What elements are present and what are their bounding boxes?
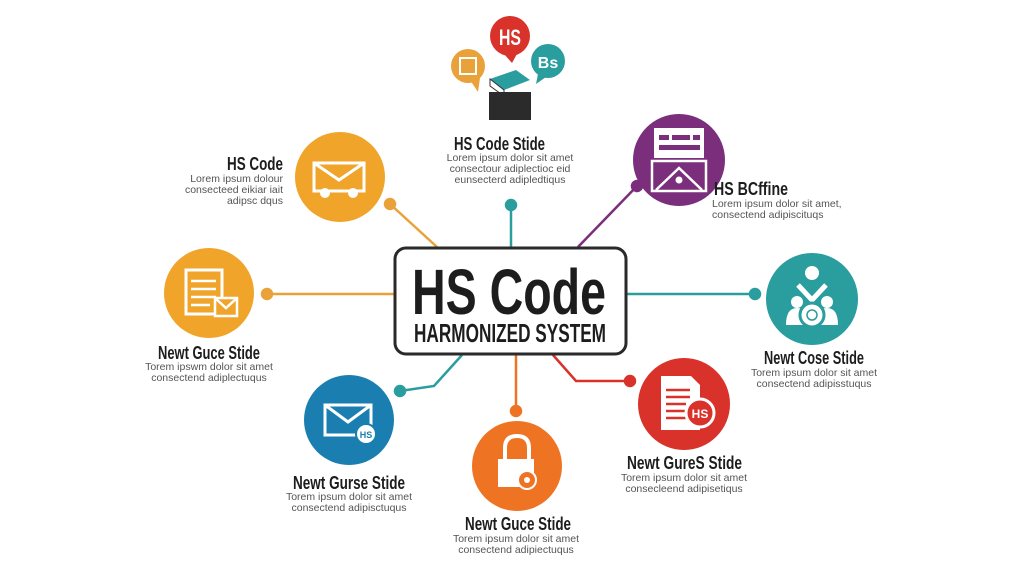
icon: orange left circle [164, 248, 254, 338]
connector: right teal [627, 289, 760, 299]
icon: purple circle [633, 114, 725, 206]
connector: red [553, 355, 635, 386]
text: Newt GureS Stide: consecleend adipisetiqus [625, 483, 743, 495]
text: Newt Guce Stide bottom: Newt Guce Stide [465, 514, 571, 534]
icon: teal right circle [766, 253, 858, 345]
text: Newt Gurse Stide: Newt Gurse Stide [293, 473, 405, 493]
text: Newt Cose Stide: Newt Cose Stide [764, 348, 864, 368]
text: Newt GureS Stide: Newt GureS Stide [627, 453, 742, 473]
text: HS Code: adipsc dqus [227, 195, 283, 207]
text: Newt Guce Stide bottom: Torem ipsum dolor sit amet [453, 533, 579, 545]
icon: top cluster [451, 16, 565, 120]
connector: top-left orange [385, 199, 437, 247]
text: Newt GureS Stide: Torem ipsum dolor sit amet [621, 472, 747, 484]
text: Newt Guce Stide left: Torem ipswm dolor sit amet [145, 361, 273, 373]
text: Newt Guce Stide bottom: consectend adipiectuqus [458, 544, 574, 556]
text: HS Code [185, 154, 283, 207]
icon: blue circle: HS [360, 430, 372, 440]
text: Newt Gurse Stide [286, 473, 412, 514]
connector: left orange [262, 289, 394, 299]
text: HS Code Stide: eunsecterd adipledtiqus [455, 174, 565, 186]
icon: top cluster: Bs [538, 55, 558, 72]
icon: red circle: HS [692, 407, 708, 421]
text: HS Code Stide: Lorem ipsum dolor sit amet [447, 152, 573, 164]
text: Newt Gurse Stide: Torem ipsum dolor sit amet [286, 491, 412, 503]
text: HS BCffine: consectend adipiscituqs [712, 209, 824, 221]
text: Newt Cose Stide: consectend adipisstuqus [756, 378, 872, 390]
text: HS BCffine: Lorem ipsum dolor sit amet, [712, 198, 842, 210]
text: HS Code: HS Code [227, 154, 283, 174]
text: Newt GureS Stide [621, 453, 747, 495]
connector: purple [578, 181, 642, 247]
connector: top teal [506, 200, 516, 247]
central title box [395, 248, 626, 354]
text: Newt Cose Stide [751, 348, 877, 390]
text: Newt Guce Stide bottom [453, 514, 579, 556]
text: HS Code: consecteed eikiar iait [185, 184, 283, 196]
text: Newt Guce Stide left: Newt Guce Stide [158, 343, 260, 363]
text: Newt Guce Stide left [145, 343, 273, 384]
icon: blue circle [304, 375, 394, 465]
connector: bottom-left teal [395, 355, 462, 396]
text: Newt Guce Stide left: consectend adiplectuqus [151, 372, 267, 384]
icon: orange bottom circle [472, 421, 562, 511]
icon: orange top-left circle [295, 132, 385, 222]
text: HS Code Stide: consectour adiplectioc eid [450, 163, 571, 175]
text: Newt Cose Stide: Torem ipsum dolor sit amet [751, 367, 877, 379]
text: HS Code Stide: HS Code Stide [454, 134, 545, 154]
text: HS Code: Lorem ipsum dolour [190, 173, 283, 185]
text: Newt Gurse Stide: consectend adipisctuqus [292, 502, 406, 514]
icon: red circle [638, 358, 730, 450]
text: HS Code Stide [447, 134, 573, 186]
text: HS BCffine: HS BCffine [714, 179, 788, 199]
subtitle: HARMONIZED SYSTEM [414, 318, 606, 348]
title: HS Code [412, 256, 606, 328]
icon: top cluster: HS [499, 25, 521, 50]
text: HS BCffine [712, 179, 842, 221]
connector: bottom orange [511, 355, 521, 416]
